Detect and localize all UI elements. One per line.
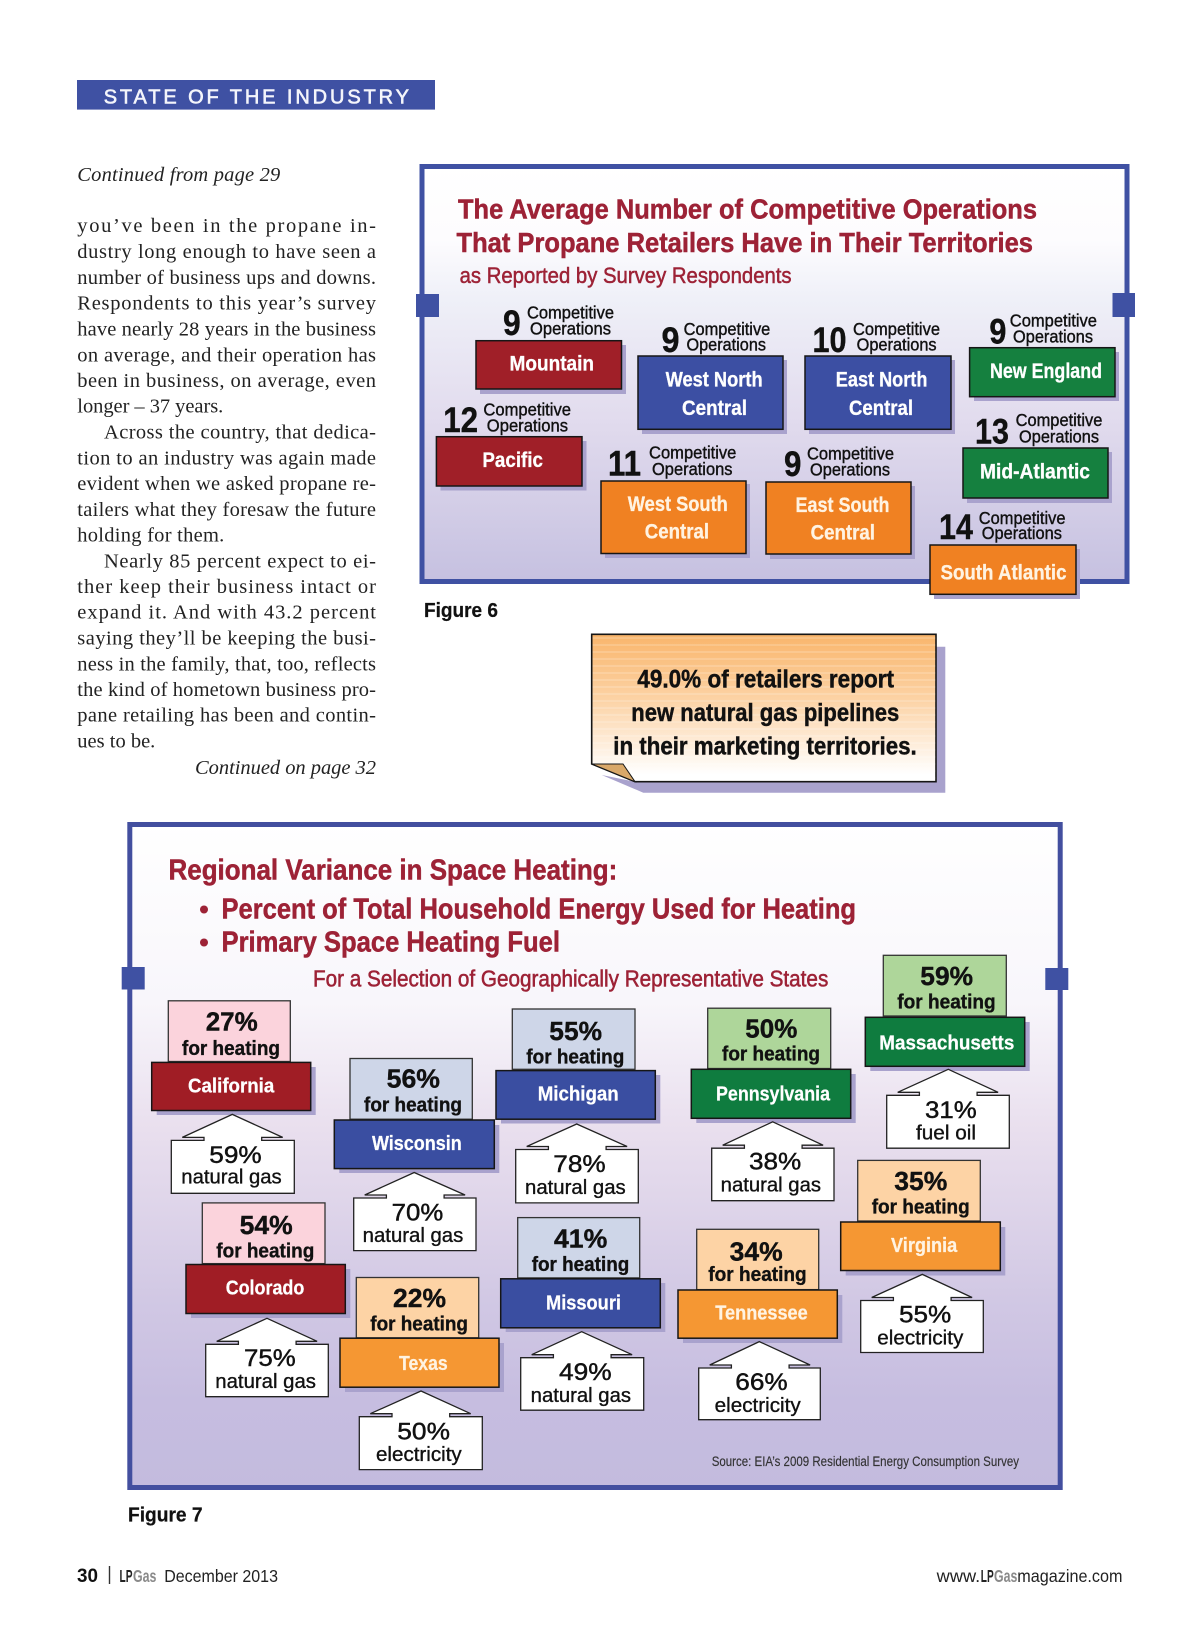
region: East South Central: 9 [784, 445, 801, 484]
fuel arrow box: natural gas [525, 1177, 626, 1199]
article body copy: Nearly 85 percent expect to ei- [104, 550, 376, 572]
state name bar [186, 1264, 350, 1318]
state: Tennessee [678, 1229, 842, 1420]
fuel arrow box: 70% [392, 1200, 443, 1226]
state: Wisconsin [334, 1058, 499, 1251]
state: Missouri [501, 1218, 665, 1410]
region: Pacific: 12 [443, 401, 478, 440]
fuel arrow box: electricity [877, 1328, 963, 1350]
continued from note: Continued from page 29 [77, 164, 280, 186]
region: Pacific: Competitive [483, 399, 571, 419]
article body copy: ther keep their business intact or [77, 576, 376, 598]
panel frame [122, 824, 1068, 1488]
region: Mid-Atlantic: Competitive [1016, 410, 1102, 430]
fuel arrow box [359, 1391, 482, 1470]
heating share box [350, 1058, 472, 1119]
continued on note: Continued on page 32 [195, 757, 376, 779]
state name bar [841, 1222, 1005, 1276]
fuel arrow box: 38% [749, 1149, 801, 1176]
region: South Atlantic: South Atlantic [940, 561, 1067, 584]
heating share box: 35% [894, 1166, 947, 1196]
heating share box [512, 1009, 635, 1069]
article body copy: tion to an industry was again made [77, 447, 376, 469]
figure 7 title: For a Selection of Geographically Representative States [313, 966, 828, 992]
article body copy: Respondents to this year’s survey [77, 293, 377, 315]
heating share box [168, 1001, 290, 1062]
callout: natural gas pipelines note: new natural gas pipelines [631, 699, 899, 727]
heating share box [708, 1008, 831, 1068]
state: Texas [340, 1278, 504, 1470]
state name bar [691, 1069, 856, 1123]
heating share box: 59% [920, 961, 973, 991]
heating share box [858, 1160, 980, 1221]
heating share box [883, 955, 1006, 1016]
figure 7 title: Percent of Total Household Energy Used for Heating [222, 893, 856, 925]
heating share box: for heating [722, 1044, 820, 1066]
section header bar [77, 80, 435, 110]
footer: folio left: 30 [77, 1566, 98, 1587]
region: West North Central: Competitive [684, 319, 770, 339]
region: Mid-Atlantic: Mid-Atlantic [980, 461, 1090, 484]
region: East North Central: Central [849, 397, 913, 420]
callout: natural gas pipelines note: in their marketing territories. [613, 732, 917, 760]
article body copy: Across the country, that dedica- [104, 422, 376, 444]
fuel arrow box: 66% [735, 1369, 788, 1396]
footer: folio left: December 2013 [164, 1566, 278, 1586]
region: East South Central: Operations [810, 459, 890, 479]
fuel arrow box: 75% [244, 1345, 296, 1372]
region: New England: 9 [989, 312, 1006, 351]
region: West North Central [638, 319, 787, 434]
state name bar: Tennessee [715, 1302, 808, 1324]
figure 7 title [168, 854, 856, 992]
figure 7 title: Primary Space Heating Fuel [222, 926, 560, 958]
region: South Atlantic [930, 508, 1080, 599]
fuel arrow box: 55% [899, 1302, 951, 1329]
section header bar: STATE OF THE INDUSTRY [104, 87, 409, 109]
article body copy: holding for them. [77, 524, 224, 546]
region: Pacific: Operations [487, 416, 568, 436]
figure 7 title: Regional Variance in Space Heating: [168, 854, 617, 886]
figure 6 title: That Propane Retailers Have in Their Territories [456, 227, 1033, 258]
state name bar: Michigan [538, 1084, 619, 1106]
region: Mountain: 9 [503, 304, 521, 343]
heating share box: for heating [872, 1196, 970, 1218]
panel: figure 7 regional variance in space heating [122, 824, 1068, 1488]
region: West South Central: Central [645, 520, 709, 543]
article body copy [77, 215, 377, 752]
region: West South Central: Operations [652, 459, 733, 479]
region: West South Central [601, 443, 750, 558]
state name bar [340, 1338, 504, 1392]
region: New England: Competitive [1010, 311, 1097, 331]
article body copy: ues to be. [77, 730, 155, 752]
heating share box: 22% [393, 1283, 446, 1313]
region: New England: Operations [1013, 326, 1093, 346]
article body copy: expand it. And with 43.2 percent [77, 602, 376, 624]
heating share box: 55% [549, 1016, 602, 1046]
region: Mountain [476, 302, 626, 394]
fuel arrow box [699, 1342, 820, 1420]
state: Michigan [496, 1009, 660, 1203]
region: Pacific [436, 399, 586, 490]
state name bar [496, 1071, 660, 1124]
region: South Atlantic: Operations [982, 523, 1062, 543]
region: South Atlantic: 14 [939, 508, 973, 547]
fuel arrow box: 50% [397, 1418, 450, 1446]
panel frame [416, 166, 1135, 582]
fuel arrow box: natural gas [531, 1385, 631, 1407]
heating share box: 54% [240, 1210, 293, 1240]
fuel arrow box: electricity [715, 1395, 801, 1417]
region: Mid-Atlantic [963, 410, 1112, 503]
region: Mountain: Operations [530, 319, 611, 339]
fuel arrow box [521, 1332, 644, 1410]
region: Mid-Atlantic: 13 [975, 413, 1009, 452]
footer: website right: LP [981, 1566, 994, 1586]
region: Pacific: Pacific [482, 449, 543, 472]
heating share box: for heating [532, 1254, 629, 1276]
heating share box: for heating [526, 1046, 624, 1068]
article body copy: you’ve been in the propane in- [77, 215, 376, 237]
fuel arrow box: natural gas [215, 1371, 316, 1393]
callout: natural gas pipelines note [592, 634, 945, 793]
fuel arrow box [354, 1172, 476, 1251]
article text column [77, 164, 377, 779]
state name bar: Colorado [226, 1278, 304, 1300]
region: East North Central: Competitive [853, 319, 940, 339]
region: East North Central [805, 319, 955, 434]
fuel arrow box: 78% [553, 1151, 606, 1178]
article body copy: dustry long enough to have seen a [77, 241, 376, 263]
state: California [152, 1001, 316, 1193]
footer: folio left [77, 1566, 278, 1587]
fuel arrow box [516, 1124, 638, 1203]
state name bar [501, 1279, 665, 1332]
article body copy: ness in the family, that, too, reflects [77, 653, 376, 675]
heating share box: for heating [370, 1313, 468, 1335]
heating share box: 56% [387, 1064, 440, 1094]
state name bar: Wisconsin [372, 1133, 462, 1155]
region: West South Central: West South [628, 493, 728, 516]
figure 6 title: as Reported by Survey Respondents [460, 263, 792, 288]
state: Pennsylvania [691, 1008, 856, 1201]
article body copy: longer – 37 years. [77, 396, 223, 418]
heating share box: 34% [730, 1236, 783, 1266]
footer: website right: Gas [994, 1566, 1017, 1586]
panel: figure 6 competitive operations [416, 166, 1135, 599]
article body copy: evident when we asked propane re- [77, 473, 376, 495]
region: East South Central: Central [811, 521, 875, 544]
footer: website right: www. [936, 1566, 980, 1586]
article body copy: tailers what they foresaw the future [77, 499, 376, 521]
heating share box [697, 1229, 819, 1290]
state name bar [678, 1290, 842, 1343]
fuel arrow box: fuel oil [916, 1123, 976, 1145]
state name bar: California [188, 1076, 275, 1098]
source note: Source: EIA’s 2009 Residential Energy Consumption Survey [712, 1454, 1019, 1469]
fuel arrow box [887, 1069, 1009, 1148]
region: East South Central: Competitive [807, 444, 894, 464]
region: West North Central: Operations [686, 335, 766, 355]
article body copy: on average, and their operation has [77, 344, 376, 366]
callout: natural gas pipelines note: 49.0% of retailers report [637, 666, 895, 694]
state: Colorado [186, 1203, 350, 1397]
region: West South Central: Competitive [649, 443, 736, 463]
region: West North Central: West North [666, 369, 763, 392]
figure 6 title: The Average Number of Competitive Operations [458, 194, 1037, 224]
state name bar: Massachusetts [879, 1032, 1014, 1054]
heating share box: 27% [206, 1006, 258, 1036]
article body copy: been in business, on average, even [77, 370, 376, 392]
fuel arrow box: electricity [376, 1444, 462, 1466]
heating share box: 41% [554, 1224, 607, 1254]
article body copy: the kind of hometown business pro- [77, 679, 376, 701]
heating share box: for heating [216, 1240, 314, 1262]
heating share box [518, 1218, 640, 1278]
region: East North Central: Operations [857, 335, 937, 355]
footer: folio left: LP [120, 1566, 133, 1586]
state: Massachusetts [865, 955, 1030, 1148]
region: Mountain: Mountain [510, 353, 594, 376]
region: West South Central: 11 [608, 444, 641, 483]
region: West North Central: Central [682, 397, 747, 420]
footer: website right: magazine.com [1017, 1566, 1122, 1586]
fuel arrow box: natural gas [181, 1166, 282, 1188]
fuel arrow box [712, 1122, 834, 1201]
article body copy: saying they’ll be keeping the busi- [77, 628, 376, 650]
fuel arrow box [171, 1114, 294, 1193]
state name bar [152, 1062, 316, 1115]
region: New England [970, 311, 1119, 401]
region: East South Central: East South [796, 494, 890, 517]
state: Virginia [841, 1160, 1005, 1352]
fuel arrow box [861, 1274, 983, 1352]
state name bar: Pennsylvania [716, 1084, 831, 1106]
region: Mountain: Competitive [527, 302, 614, 322]
region: New England: New England [990, 360, 1102, 383]
state name bar: Virginia [891, 1235, 958, 1257]
figure 7 caption: Figure 7 [128, 1505, 203, 1527]
heating share box: for heating [897, 992, 996, 1014]
fuel arrow box [206, 1318, 328, 1397]
region: East North Central: East North [836, 369, 927, 392]
article body copy: have nearly 28 years in the business [77, 319, 376, 341]
figure 6 title [456, 194, 1037, 288]
state name bar: Missouri [546, 1292, 621, 1314]
heating share box [356, 1278, 479, 1338]
fuel arrow box: natural gas [363, 1225, 463, 1247]
figure 6 caption: Figure 6 [424, 600, 498, 622]
state name bar [865, 1017, 1030, 1071]
heating share box: for heating [364, 1094, 462, 1116]
region: East North Central: 10 [812, 321, 846, 360]
fuel arrow box: 59% [209, 1142, 262, 1169]
footer: folio left: Gas [133, 1566, 157, 1586]
heating share box: for heating [708, 1264, 807, 1286]
article body copy: pane retailing has been and contin- [77, 705, 376, 727]
region: East South Central [766, 444, 915, 559]
region: South Atlantic: Competitive [979, 508, 1066, 528]
fuel arrow box: 31% [925, 1097, 977, 1124]
footer: website right [936, 1566, 1122, 1586]
state name bar: Texas [399, 1353, 448, 1375]
article body copy: number of business ups and downs. [77, 267, 376, 289]
fuel arrow box: 49% [559, 1359, 612, 1386]
heating share box: 50% [745, 1014, 797, 1044]
heating share box: for heating [182, 1038, 280, 1060]
state name bar [334, 1120, 499, 1173]
heating share box [202, 1203, 325, 1264]
region: Mid-Atlantic: Operations [1019, 427, 1099, 447]
region: West North Central: 9 [662, 321, 680, 360]
fuel arrow box: natural gas [721, 1175, 821, 1197]
